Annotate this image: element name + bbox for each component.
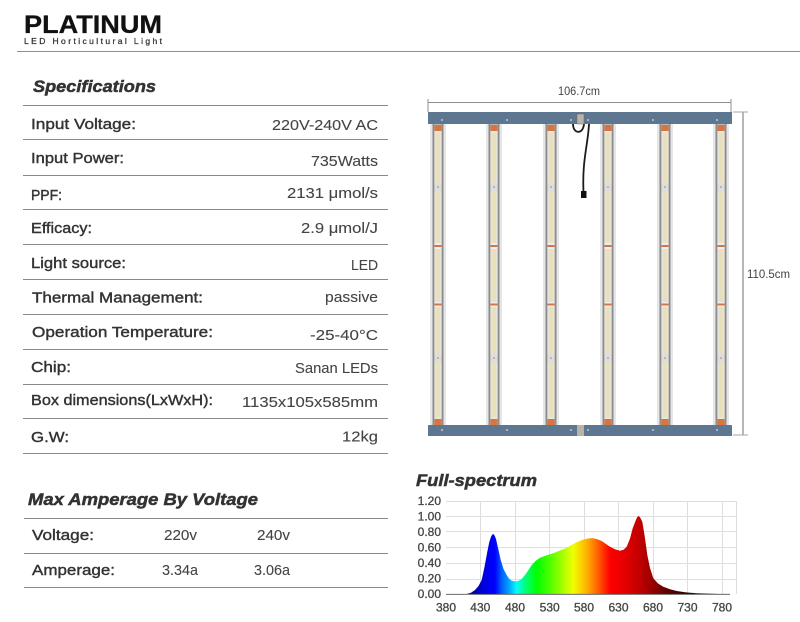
- x axis labels: 680: [643, 600, 663, 614]
- row: amperage: Amperage:: [32, 562, 115, 579]
- row: input voltage: Input Voltage:: [31, 116, 136, 133]
- y axis labels: [418, 494, 441, 601]
- panel: full spectrum: [416, 471, 736, 614]
- power cord: [573, 114, 589, 198]
- spectrum chart: [418, 494, 736, 614]
- panel: specifications: [23, 77, 388, 454]
- row: amperage: 3.34a: [162, 563, 199, 579]
- row: operation temperature: [32, 324, 378, 344]
- y axis labels: 0.20: [418, 572, 441, 586]
- heading: specifications: Specifications: [33, 77, 156, 96]
- row: ppf: PPF:: [31, 187, 62, 204]
- x axis labels: 430: [470, 600, 491, 614]
- logo wordmark: PLATINUM: [24, 11, 162, 39]
- row: amperage: 3.06a: [254, 563, 291, 579]
- row: input voltage: [31, 116, 378, 134]
- row: operation temperature: Operation Temperature:: [32, 324, 213, 341]
- row: input power: [31, 150, 378, 170]
- y axis labels: 1.00: [418, 510, 441, 524]
- x axis labels: 630: [608, 600, 629, 614]
- row: chip: Chip:: [31, 359, 71, 376]
- heading: full-spectrum: Full-spectrum: [416, 471, 537, 490]
- x axis labels: 380: [436, 600, 456, 614]
- x axis labels: 730: [677, 600, 698, 614]
- row: thermal management: [32, 290, 378, 306]
- y axis labels: 0.00: [418, 587, 441, 601]
- row: input voltage: 220V-240V AC: [272, 118, 378, 134]
- row: voltage: 240v: [257, 528, 291, 544]
- row: efficacy: Efficacy:: [31, 220, 92, 237]
- row: box dimensions: 1135x105x585mm: [242, 395, 378, 411]
- row: gross weight: 12kg: [342, 430, 378, 446]
- top rail: [428, 112, 732, 124]
- y axis labels: 0.40: [418, 556, 441, 570]
- row: input power: 735Watts: [311, 154, 378, 170]
- row: voltage: [32, 527, 291, 544]
- row: efficacy: [31, 220, 378, 237]
- y axis labels: 0.80: [418, 525, 441, 539]
- bottom rail: [428, 425, 732, 436]
- row: light source: Light source:: [31, 255, 126, 272]
- row: thermal management: passive: [325, 290, 378, 306]
- row: light source: [31, 255, 378, 274]
- row: chip: Sanan LEDs: [295, 361, 378, 377]
- row: operation temperature: -25-40°C: [310, 328, 378, 344]
- row: voltage: 220v: [164, 528, 198, 544]
- amperage table rules: [24, 518, 388, 588]
- x axis labels: 580: [574, 600, 594, 614]
- y axis labels: 0.60: [418, 540, 441, 554]
- x axis labels: 780: [712, 600, 732, 614]
- logo: [24, 11, 163, 46]
- baseline: [446, 593, 730, 595]
- spectrum curve: [446, 516, 727, 594]
- x axis labels: 530: [540, 600, 560, 614]
- panel: product diagram: [428, 84, 790, 436]
- spec table rules: [23, 106, 388, 454]
- row: amperage: [32, 562, 291, 579]
- y axis labels: 1.20: [418, 494, 441, 508]
- row: gross weight: G.W:: [31, 429, 69, 446]
- row: thermal management: Thermal Management:: [32, 290, 203, 306]
- x axis labels: [436, 600, 732, 614]
- row: voltage: Voltage:: [32, 527, 94, 544]
- row: gross weight: [31, 429, 378, 446]
- width dimension: 106.7cm: [558, 84, 600, 98]
- row: box dimensions: Box dimensions(LxWxH):: [31, 392, 213, 409]
- row: ppf: 2131 μmol/s: [287, 186, 378, 202]
- logo tagline: LED Horticultural Light: [24, 36, 163, 46]
- chart grid: [446, 501, 736, 594]
- x axis labels: 480: [505, 600, 525, 614]
- row: light source: LED: [351, 258, 378, 274]
- header rule: [17, 50, 800, 52]
- row: input power: Input Power:: [31, 150, 124, 167]
- heading: max amperage: Max Amperage By Voltage: [28, 490, 258, 509]
- light bars: [430, 124, 729, 425]
- row: ppf: [31, 186, 378, 204]
- height dimension: 110.5cm: [747, 267, 790, 281]
- row: box dimensions: [31, 392, 378, 411]
- panel: max amperage by voltage: [24, 490, 388, 588]
- row: chip: [31, 359, 378, 377]
- row: efficacy: 2.9 μmol/J: [301, 221, 378, 237]
